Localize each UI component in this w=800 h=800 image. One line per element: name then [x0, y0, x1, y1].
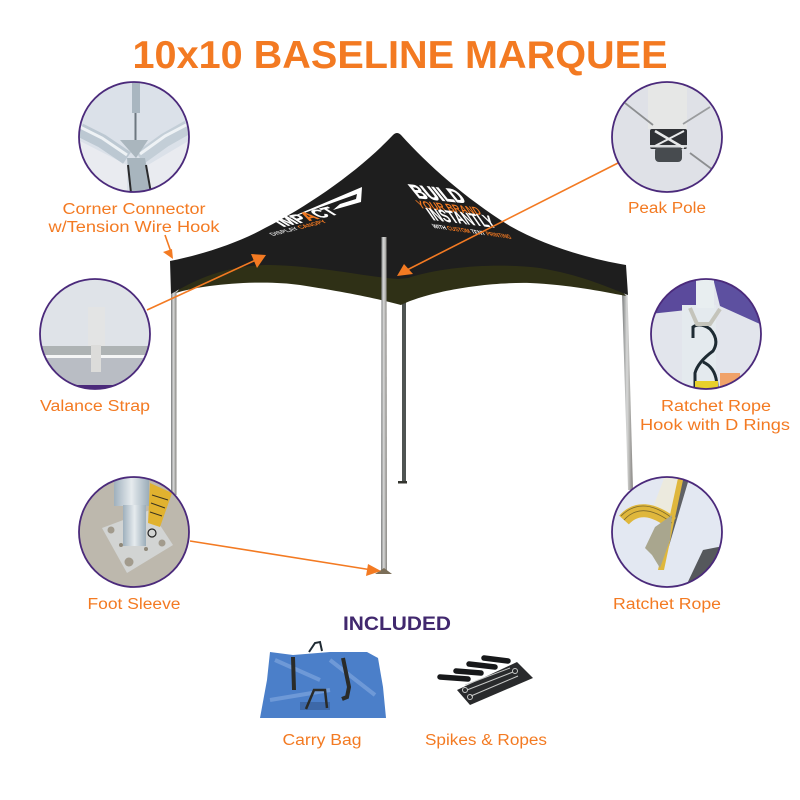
heading: included: INCLUDED [343, 614, 451, 635]
label: spikes and ropes: Spikes & Ropes [425, 732, 547, 749]
detail: corner connector [78, 81, 190, 193]
label: corner connector [47, 201, 220, 236]
detail: foot sleeve [78, 476, 190, 588]
canopy logo right: BUILD [403, 180, 471, 208]
detail: ratchet rope hook [650, 278, 762, 391]
label: ratchet rope hook [640, 398, 790, 434]
canopy logo right: WITH CUSTOM TENT PRINTING [431, 223, 513, 241]
front pole [375, 237, 392, 574]
marquee tent [170, 133, 633, 574]
canopy logo right [403, 180, 513, 241]
detail: valance strap [39, 278, 151, 390]
left pole [171, 290, 176, 495]
icon: spikes and ropes [440, 658, 533, 705]
canopy logo left: DISPLAY CANOPY [268, 219, 330, 237]
label: foot sleeve: Foot Sleeve [88, 596, 180, 613]
title: 10x10 BASELINE MARQUEE [132, 34, 668, 77]
label: ratchet rope hook: Ratchet Rope [661, 398, 771, 415]
detail: ratchet rope [611, 476, 723, 588]
canopy logo left: IMPACT [267, 204, 344, 229]
right pole [622, 292, 633, 490]
canopy underside [176, 265, 626, 305]
back pole [398, 296, 407, 484]
canopy logo right: INSTANTLY [423, 205, 501, 233]
label: ratchet rope hook: Hook with D Rings [640, 417, 790, 434]
arrow: foot sleeve [190, 541, 381, 576]
arrow: peak pole [397, 163, 618, 276]
label: carry bag: Carry Bag [282, 732, 362, 749]
arrow: corner connector [163, 235, 173, 259]
label: corner connector: w/Tension Wire Hook [47, 219, 220, 236]
label: ratchet rope: Ratchet Rope [613, 596, 721, 613]
label: valance strap: Valance Strap [40, 398, 150, 415]
detail: peak pole [611, 81, 723, 193]
icon: carry bag [260, 642, 386, 718]
canopy logo left [267, 187, 362, 237]
label: corner connector: Corner Connector [62, 201, 206, 218]
label: peak pole: Peak Pole [628, 200, 706, 217]
arrow: valance strap [147, 254, 266, 310]
canopy roof [170, 133, 628, 295]
canopy logo right: YOUR BRAND [413, 198, 485, 218]
